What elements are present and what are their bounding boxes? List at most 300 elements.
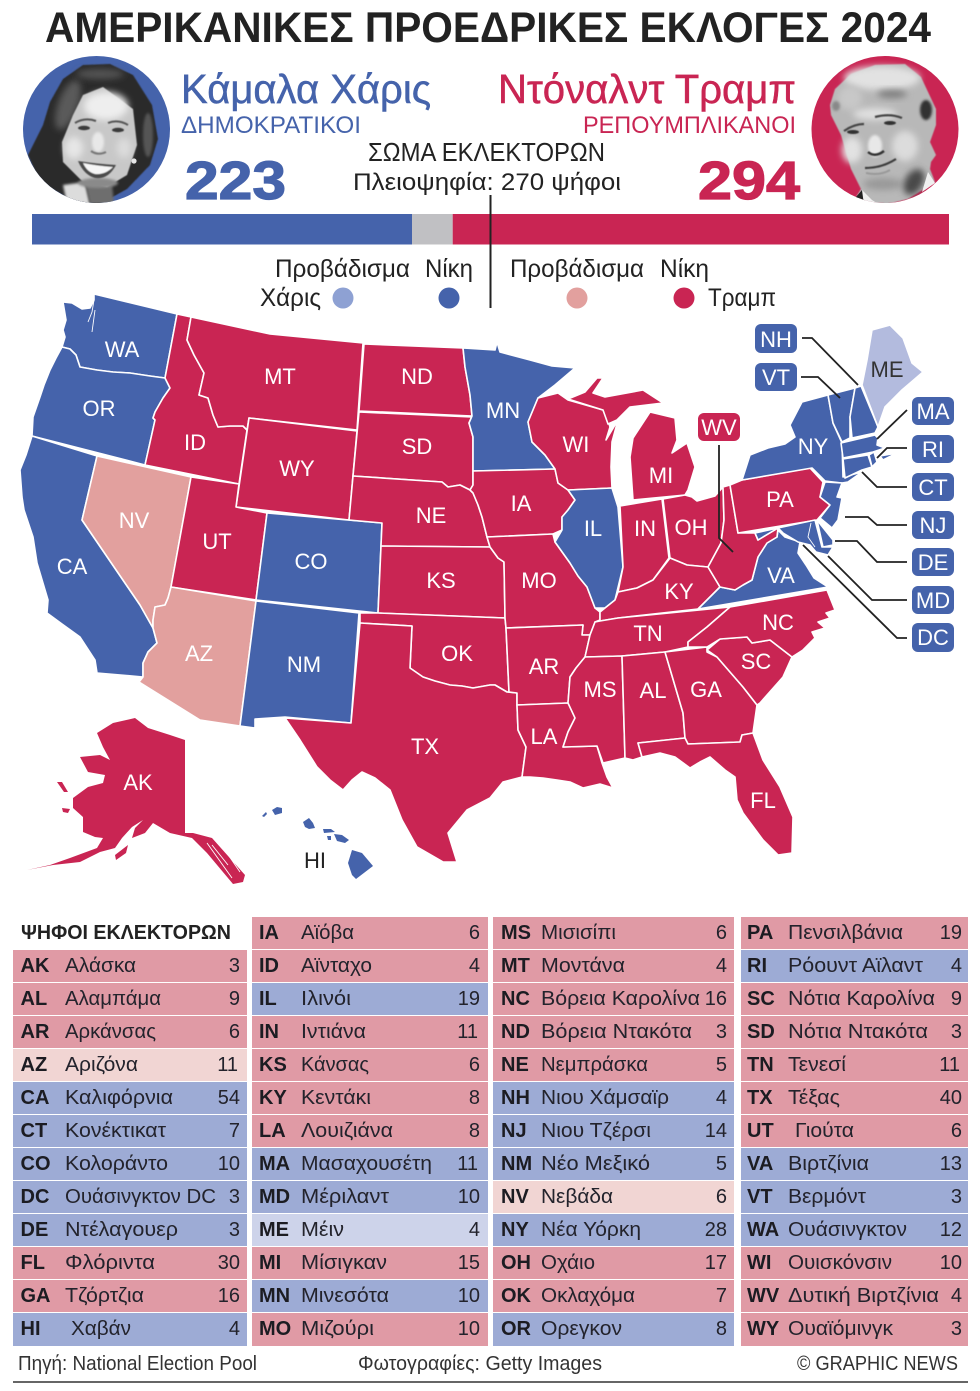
row: SC xyxy=(741,983,968,1015)
state: Ohio xyxy=(663,487,724,567)
row: NY xyxy=(493,1214,734,1246)
state: New York xyxy=(742,395,862,483)
row: AL xyxy=(13,983,247,1015)
row: WA: WA xyxy=(747,1219,779,1241)
state: Idaho: ID xyxy=(184,430,206,455)
legend: Νίκη xyxy=(425,255,473,283)
state: Michigan xyxy=(568,378,695,500)
state: Pennsylvania xyxy=(730,468,830,533)
state: North Carolina: NC xyxy=(762,610,794,635)
row: LA: Λουιζιάνα xyxy=(301,1120,393,1142)
row: CO: Κολοράντο xyxy=(65,1153,168,1175)
row: LA: LA xyxy=(259,1120,286,1142)
row: IN: Ιντιάνα xyxy=(301,1021,366,1043)
row: NH: Νιου Χάμσαϊρ xyxy=(541,1087,669,1109)
row: OH xyxy=(493,1247,734,1279)
state: Virginia: VA xyxy=(767,563,795,588)
state: Wisconsin xyxy=(528,393,618,490)
state: Iowa xyxy=(470,469,575,537)
row: MN xyxy=(252,1280,488,1312)
row: UT: 6 xyxy=(951,1120,962,1142)
state: Utah xyxy=(171,477,267,600)
row: ND: 3 xyxy=(716,1021,727,1043)
row: NE: NE xyxy=(501,1054,529,1076)
row: AK xyxy=(13,950,247,982)
row: MO: MO xyxy=(259,1318,291,1340)
row: IL: IL xyxy=(259,988,277,1010)
row: MN: MN xyxy=(259,1285,290,1307)
state: Montana xyxy=(187,317,363,430)
state: Alabama: AL xyxy=(640,678,666,703)
state: Virginia xyxy=(698,530,828,609)
state: Washington: WA xyxy=(105,337,140,362)
row: MT: MT xyxy=(501,955,530,977)
callout: RI: RI xyxy=(922,437,944,462)
row: MS: MS xyxy=(501,922,531,944)
row: NJ: 14 xyxy=(705,1120,727,1142)
photo credit: Φωτογραφίες: Getty Images xyxy=(358,1353,602,1375)
row: VT: Βερμόντ xyxy=(788,1186,866,1208)
row: NE: Νεμπράσκα xyxy=(541,1054,648,1076)
row: IL: 19 xyxy=(458,988,480,1010)
state: Alaska: AK xyxy=(123,770,153,795)
row: NM: NM xyxy=(501,1153,532,1175)
row: ND xyxy=(493,1016,734,1048)
row: WY: 3 xyxy=(951,1318,962,1340)
state: Ohio: OH xyxy=(674,515,708,540)
callout: DC: DC xyxy=(917,625,949,650)
row: MI: 15 xyxy=(458,1252,480,1274)
row: ID xyxy=(252,950,488,982)
row: HI xyxy=(13,1313,247,1346)
state: Georgia xyxy=(665,647,757,744)
callout: RI xyxy=(912,435,954,463)
row: WI: 10 xyxy=(940,1252,962,1274)
state: Missouri: MO xyxy=(521,568,557,593)
state: Louisiana xyxy=(517,703,613,788)
table: electoral votes by state xyxy=(13,917,968,1346)
row: NC: NC xyxy=(501,988,530,1010)
state: Montana: MT xyxy=(264,364,296,389)
state: Alaska xyxy=(27,718,245,884)
row: SC: SC xyxy=(747,988,775,1010)
row: MT xyxy=(493,950,734,982)
row: TX: TX xyxy=(747,1087,773,1109)
row: PA: 19 xyxy=(940,922,962,944)
state: Louisiana: LA xyxy=(531,724,558,749)
state: Mississippi xyxy=(563,656,625,763)
state: California: CA xyxy=(57,554,88,579)
title: ΑΜΕΡΙΚΑΝΙΚΕΣ ΠΡΟΕΔΡΙΚΕΣ ΕΚΛΟΓΕΣ 2024 xyxy=(45,4,931,52)
row: MI xyxy=(252,1247,488,1279)
row: NC: 16 xyxy=(705,988,727,1010)
row: UT xyxy=(741,1115,968,1147)
state: Colorado: CO xyxy=(294,549,328,574)
state: Mississippi: MS xyxy=(584,677,616,702)
row: SD xyxy=(741,1016,968,1048)
row: VT xyxy=(741,1181,968,1213)
row: IA xyxy=(252,917,488,949)
row: TX xyxy=(741,1082,968,1114)
state: California xyxy=(20,436,157,677)
row: MD: MD xyxy=(259,1186,290,1208)
state: New Mexico: NM xyxy=(287,652,321,677)
row: VT: VT xyxy=(747,1186,773,1208)
row: CT: CT xyxy=(20,1120,47,1142)
row: ID: ID xyxy=(259,955,279,977)
state: New York: NY xyxy=(798,434,829,459)
row: NJ xyxy=(493,1115,734,1147)
row: NH xyxy=(493,1082,734,1114)
row: WV: 4 xyxy=(951,1285,962,1307)
legend: Προβάδισμα xyxy=(510,255,644,283)
row: SC: Νότια Καρολίνα xyxy=(788,988,935,1010)
row: AR xyxy=(13,1016,247,1048)
row: PA: Πενσιλβάνια xyxy=(788,922,903,944)
row: WI: Ουισκόνσιν xyxy=(788,1252,892,1274)
state: New Jersey xyxy=(820,482,842,528)
row: AL: AL xyxy=(20,988,47,1010)
row: DC: Ουάσινγκτον DC xyxy=(65,1186,216,1208)
row: FL: Φλόριντα xyxy=(65,1252,155,1274)
row: NM xyxy=(493,1148,734,1180)
row: UT: UT xyxy=(747,1120,774,1142)
state: Michigan: MI xyxy=(649,463,673,488)
state: Minnesota: MN xyxy=(486,398,520,423)
state: Wisconsin: WI xyxy=(563,432,589,457)
row: MO: Μιζούρι xyxy=(301,1318,374,1340)
row: AK: Αλάσκα xyxy=(65,955,136,977)
row: RI: Ρόουντ Αϊλαντ xyxy=(788,955,923,977)
row: NM: Νέο Μεξικό xyxy=(541,1153,650,1175)
row: MS: Μισισίπι xyxy=(541,922,616,944)
row: HI: Χαβάν xyxy=(71,1318,131,1340)
state: Maryland xyxy=(755,520,833,555)
row: KS: 6 xyxy=(469,1054,480,1076)
row: VA: 13 xyxy=(940,1153,962,1175)
state: Kentucky xyxy=(600,558,720,621)
state: Florida xyxy=(638,733,793,855)
state: Tennessee: TN xyxy=(633,621,663,646)
candidate name: Donald Trump: Ντόναλντ Τραμπ xyxy=(498,66,796,112)
row: MO xyxy=(252,1313,488,1346)
row: GA: 16 xyxy=(218,1285,240,1307)
callout leader lines xyxy=(719,338,907,638)
row: LA: 8 xyxy=(469,1120,480,1142)
callout: CT: CT xyxy=(918,475,948,500)
state: Hawaii xyxy=(262,807,373,879)
row: OR: 8 xyxy=(716,1318,727,1340)
row: MA: Μασαχουσέτη xyxy=(301,1153,432,1175)
state: Tennessee xyxy=(585,607,730,657)
row: WY: Ουαϊόμινγκ xyxy=(788,1318,894,1340)
row: DE: Ντέλαγουερ xyxy=(65,1219,178,1241)
state: Indiana xyxy=(618,499,669,592)
row: MT: Μοντάνα xyxy=(541,955,625,977)
footer rule xyxy=(13,1381,968,1383)
row: WI xyxy=(741,1247,968,1279)
electoral college heading: ΣΩΜΑ ΕΚΛΕΚΤΟΡΩΝ xyxy=(368,139,605,167)
row: ME: ME xyxy=(259,1219,289,1241)
state: Nevada xyxy=(82,456,191,628)
candidate name: Kamala Harris: Κάμαλα Χάρις xyxy=(181,66,431,112)
row: OR: Ορεγκον xyxy=(541,1318,622,1340)
state: Wyoming xyxy=(236,418,357,520)
row: KS: KS xyxy=(259,1054,287,1076)
row: HI: 4 xyxy=(229,1318,240,1340)
state: Hawaii: HI xyxy=(304,848,326,873)
row: VT: 3 xyxy=(951,1186,962,1208)
row: IN: 11 xyxy=(457,1021,478,1043)
party: Democrats: ΔΗΜΟΚΡΑΤΙΚΟΙ xyxy=(181,112,361,139)
legend: Τραμπ xyxy=(708,284,776,312)
state: Kansas xyxy=(378,546,505,618)
row: DE: 3 xyxy=(229,1219,240,1241)
state: Oregon xyxy=(32,347,170,465)
row: AL: Αλαμπάμα xyxy=(65,988,161,1010)
row: MT: 4 xyxy=(716,955,727,977)
callout: MA: MA xyxy=(916,399,950,424)
row: KY: Κεντάκι xyxy=(301,1087,371,1109)
row: PA xyxy=(741,917,968,949)
row: SD: SD xyxy=(747,1021,775,1043)
row: TN xyxy=(741,1049,968,1081)
row: ME xyxy=(252,1214,488,1246)
state: Texas: TX xyxy=(411,734,439,759)
row: RI: RI xyxy=(747,955,767,977)
state: Oklahoma xyxy=(360,613,509,692)
source credit: Πηγή: National Election Pool xyxy=(18,1353,257,1375)
row: SC: 9 xyxy=(951,988,962,1010)
table heading: ΨΗΦΟΙ ΕΚΛΕΚΤΟΡΩΝ xyxy=(21,921,231,944)
row: CA xyxy=(13,1082,247,1114)
state: South Carolina: SC xyxy=(741,649,771,674)
state: North Carolina xyxy=(688,590,835,657)
state: Georgia: GA xyxy=(690,677,722,702)
row: ND: ND xyxy=(501,1021,530,1043)
row: OK xyxy=(493,1280,734,1312)
row: AR: AR xyxy=(20,1021,50,1043)
electoral votes: Harris: 223 xyxy=(185,151,286,211)
row: IN: IN xyxy=(259,1021,279,1043)
copyright: © GRAPHIC NEWS xyxy=(797,1353,958,1375)
state: Pennsylvania: PA xyxy=(766,487,794,512)
callout: NH xyxy=(755,324,797,353)
callout: DE xyxy=(912,548,954,576)
row: NY: 28 xyxy=(705,1219,727,1241)
row: NE: 5 xyxy=(716,1054,727,1076)
row: SD: Νότια Ντακότα xyxy=(788,1021,928,1043)
state: Nebraska xyxy=(349,476,490,547)
row: CO xyxy=(13,1148,247,1180)
row: OR: OR xyxy=(501,1318,532,1340)
row: TX: 40 xyxy=(940,1087,962,1109)
row: RI: 4 xyxy=(951,955,962,977)
row: DE xyxy=(13,1214,247,1246)
map of the United States xyxy=(20,294,923,884)
state: Texas xyxy=(285,623,526,862)
state: Rhode Island xyxy=(869,452,877,467)
row: AZ: AZ xyxy=(20,1054,47,1076)
row: WY xyxy=(741,1313,968,1346)
row: IA: Αϊόβα xyxy=(301,922,354,944)
row: NC: Βόρεια Καρολίνα xyxy=(541,988,700,1010)
state: Vermont xyxy=(828,388,855,442)
row: MD: 10 xyxy=(458,1186,480,1208)
row: DC: 3 xyxy=(229,1186,240,1208)
row: MI: Μίσιγκαν xyxy=(301,1252,387,1274)
electoral vote bar xyxy=(32,214,949,244)
legend xyxy=(260,255,776,312)
callout: NJ xyxy=(912,511,954,539)
state: North Dakota xyxy=(359,344,472,416)
legend: Νίκη xyxy=(660,255,709,283)
row: OK: OK xyxy=(501,1285,532,1307)
state: North Dakota: ND xyxy=(401,364,433,389)
row: TX: Τέξας xyxy=(788,1087,840,1109)
state: Arizona: AZ xyxy=(185,641,213,666)
row: MA: 11 xyxy=(457,1153,478,1175)
state: Maine xyxy=(862,325,923,427)
state: Arkansas: AR xyxy=(529,654,559,679)
state: South Carolina xyxy=(707,637,792,705)
row: TN: TN xyxy=(747,1054,774,1076)
party: Republicans: ΡΕΠΟΥΜΠΛΙΚΑΝΟΙ xyxy=(583,112,796,139)
row: NV xyxy=(493,1181,734,1213)
row: WA xyxy=(741,1214,968,1246)
callout: NH: NH xyxy=(760,327,792,352)
row: OH: 17 xyxy=(705,1252,727,1274)
state: Nevada: NV xyxy=(119,508,150,533)
row: OR xyxy=(493,1313,734,1346)
state: Colorado xyxy=(256,513,382,613)
row: CT: 7 xyxy=(229,1120,240,1142)
row: AZ: 11 xyxy=(217,1054,238,1076)
row: WA: Ουάσινγκτον xyxy=(788,1219,907,1241)
row: TN: Τενεσί xyxy=(788,1054,847,1076)
row: CA: Καλιφόρνια xyxy=(65,1087,173,1109)
row: MA xyxy=(252,1148,488,1180)
row: NH: 4 xyxy=(716,1087,727,1109)
row: AZ: Αριζόνα xyxy=(65,1054,138,1076)
row: NV: NV xyxy=(501,1186,529,1208)
row: MI: MI xyxy=(259,1252,281,1274)
row: LA xyxy=(252,1115,488,1147)
row: ND: Βόρεια Ντακότα xyxy=(541,1021,692,1043)
row: RI xyxy=(741,950,968,982)
row: CT: Κονέκτικατ xyxy=(65,1120,166,1142)
row: KS xyxy=(252,1049,488,1081)
state: Nebraska: NE xyxy=(416,503,446,528)
row: OH: OH xyxy=(501,1252,531,1274)
state: Missouri xyxy=(487,534,600,635)
callout: VT: VT xyxy=(762,365,790,390)
row: AL: 9 xyxy=(229,988,240,1010)
state: New Hampshire xyxy=(850,386,878,438)
row: MS: 6 xyxy=(716,922,727,944)
row: AK: AK xyxy=(20,955,50,977)
row: KY: 8 xyxy=(469,1087,480,1109)
callout: DC xyxy=(912,623,954,652)
callout: VT xyxy=(755,363,797,391)
legend: Χάρις xyxy=(260,284,321,312)
row: WV xyxy=(741,1280,968,1312)
state: South Dakota xyxy=(353,412,473,490)
row: DC xyxy=(13,1181,247,1213)
state: South Dakota: SD xyxy=(402,434,432,459)
state: Illinois: IL xyxy=(584,516,602,541)
row: NJ: NJ xyxy=(501,1120,527,1142)
row: CO: 10 xyxy=(218,1153,240,1175)
state: Arkansas xyxy=(506,625,590,705)
state: Utah: UT xyxy=(202,529,232,554)
row: MS xyxy=(493,917,734,949)
state: West Virginia xyxy=(708,485,778,590)
callout: DE: DE xyxy=(918,550,948,575)
row: ID: 4 xyxy=(469,955,480,977)
state: Alabama xyxy=(622,652,685,760)
row: NY: Νέα Υόρκη xyxy=(541,1219,641,1241)
row: VA: VA xyxy=(747,1153,773,1175)
row: FL xyxy=(13,1247,247,1279)
row: DC: DC xyxy=(20,1186,49,1208)
callout: MD: MD xyxy=(916,588,950,613)
callout: CT xyxy=(912,473,954,501)
state: Illinois xyxy=(555,488,623,608)
row: KS: Κάνσας xyxy=(301,1054,369,1076)
row: GA: GA xyxy=(20,1285,50,1307)
state: Idaho xyxy=(145,314,247,484)
callout: WV: WV xyxy=(701,415,737,440)
row: GA xyxy=(13,1280,247,1312)
state: Kentucky: KY xyxy=(664,579,694,604)
row: IA: 6 xyxy=(469,922,480,944)
row: WV: WV xyxy=(747,1285,780,1307)
row: NE xyxy=(493,1049,734,1081)
row: OK: Οκλαχόμα xyxy=(541,1285,635,1307)
state: Oregon: OR xyxy=(82,396,116,421)
row: MO: 10 xyxy=(458,1318,480,1340)
row: IA: IA xyxy=(259,922,279,944)
row: HI: HI xyxy=(20,1318,40,1340)
row: MN: Μινεσότα xyxy=(301,1285,389,1307)
row: AZ xyxy=(13,1049,247,1081)
row: CT xyxy=(13,1115,247,1147)
row: NJ: Νιου Τζέρσι xyxy=(541,1120,651,1142)
row: FL: 30 xyxy=(218,1252,240,1274)
state: Connecticut xyxy=(843,455,872,478)
row: TN: 11 xyxy=(939,1054,960,1076)
row: KY xyxy=(252,1082,488,1114)
row: MD: Μέριλαντ xyxy=(301,1186,389,1208)
state: Oklahoma: OK xyxy=(441,641,473,666)
row: ID: Αϊνταχο xyxy=(301,955,372,977)
state: Delaware xyxy=(817,520,833,547)
state: Maine: ME xyxy=(870,357,904,382)
row: IL: Ιλινόι xyxy=(301,988,351,1010)
row: AK: 3 xyxy=(229,955,240,977)
row: VA: Βιρτζίνια xyxy=(788,1153,869,1175)
row: WA: 12 xyxy=(940,1219,962,1241)
row: AR: Αρκάνσας xyxy=(65,1021,156,1043)
row: ME: 4 xyxy=(469,1219,480,1241)
row: WI: WI xyxy=(747,1252,771,1274)
portrait: Kamala Harris xyxy=(23,56,170,204)
row: AR: 6 xyxy=(229,1021,240,1043)
row: NH: NH xyxy=(501,1087,530,1109)
row: NY: NY xyxy=(501,1219,529,1241)
majority note: Πλειοψηφία: 270 ψήφοι xyxy=(353,169,621,196)
